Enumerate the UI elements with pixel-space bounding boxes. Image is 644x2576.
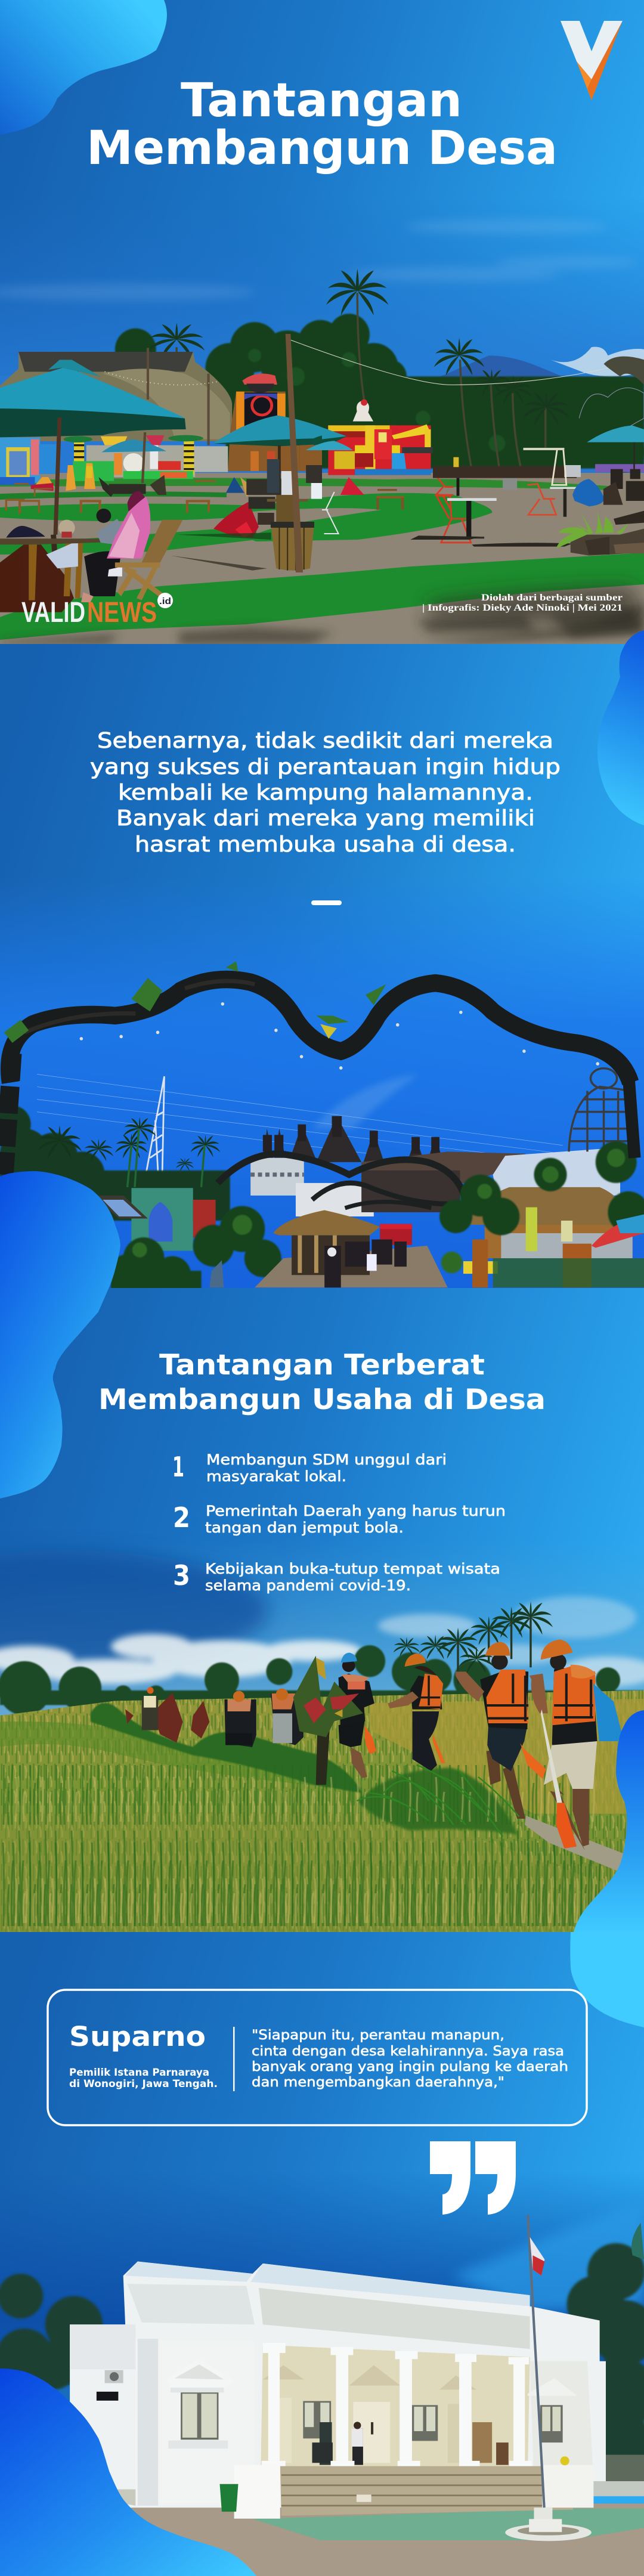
photo: rice field [0, 1596, 644, 1968]
list item 3: selama pandemi covid-19. [205, 1577, 411, 1594]
crowd [324, 1240, 407, 1287]
people on porch [320, 2422, 332, 2465]
wooden chair [115, 520, 183, 600]
speaker role: di Wonogiri, Jawa Tengah. [69, 2078, 218, 2089]
list item 3 [173, 1559, 500, 1594]
steps [280, 2466, 573, 2516]
building body [70, 2262, 606, 2507]
tower [146, 1076, 165, 1175]
people and seating [5, 459, 322, 538]
quote text: cinta dengan desa kelahirannya. Saya rasa [252, 2044, 564, 2059]
icon: closing quotation mark [430, 2141, 516, 2215]
grass ridge [91, 1703, 361, 1793]
logo: ValidNews wordmark: VALID [21, 597, 85, 628]
credit line: Diolah dari berbagai sumber [481, 593, 623, 603]
logo: ValidNews wordmark: NEWS [87, 597, 157, 628]
plant and rock [556, 509, 644, 556]
large arch [4, 961, 634, 1175]
windows [181, 2392, 563, 2442]
person 1 [530, 1639, 622, 1850]
quote text: dan mengembangkan daerahnya," [252, 2075, 504, 2090]
vertical divider [233, 2027, 235, 2091]
quote box [48, 1990, 587, 2125]
person 5 and 6 far [224, 1689, 304, 1747]
photo: arch and village [0, 961, 644, 1294]
chairs and tables [436, 477, 556, 543]
logo: ValidNews wordmark [21, 593, 173, 628]
intro text: yang sukses di perantauan ingin hidup [90, 755, 561, 779]
quote text: "Siapapun itu, perantau manapun, [252, 2027, 504, 2043]
big umbrella [0, 360, 186, 552]
panel: hero title and park photo [0, 0, 644, 644]
right umbrella [587, 425, 644, 442]
person 3 [388, 1654, 445, 1771]
green bin [220, 2484, 239, 2512]
intro text: kembali ke kampung halamannya. [118, 781, 533, 805]
title: Membangun Desa [86, 122, 558, 175]
tent and thatched roof [493, 1147, 620, 1196]
quote text: banyak orang yang ingin pulang ke daerah [252, 2059, 568, 2075]
blob: left side middle [0, 1171, 120, 1498]
table and family [0, 491, 150, 612]
blob: bottom left [0, 2368, 256, 2576]
bouncy castle [328, 400, 433, 475]
green wall [131, 1188, 193, 1251]
rice field [0, 1690, 644, 1968]
robot inflatable [228, 373, 322, 471]
list item 2: 2 [173, 1501, 190, 1534]
photo: park scene [0, 269, 644, 644]
blob: right side lower [570, 1710, 644, 2027]
intro text: Banyak dari mereka yang memiliki [116, 806, 535, 831]
panel: challenges list and rice field photo [0, 1288, 644, 1968]
foreground grass texture [0, 1765, 596, 1932]
small croton plants [125, 1692, 209, 1743]
panel: intro text and arch photo [0, 644, 644, 1294]
blob: right side upper [597, 630, 644, 825]
trees left [0, 1106, 230, 1221]
list item 3: 3 [173, 1559, 190, 1592]
inflatables [0, 435, 228, 485]
title [86, 74, 558, 175]
concrete path [525, 1816, 626, 1874]
panel: quote and palace photo [0, 1932, 644, 2576]
intro text [90, 729, 561, 857]
list item 2: Pemerintah Daerah yang harus turun [206, 1503, 506, 1519]
person 4 [339, 1653, 376, 1778]
blue beanbag [572, 479, 605, 506]
columns [262, 2343, 532, 2467]
logo: ValidNews wordmark: .id [159, 596, 171, 606]
blob: top right of quote panel overlay [570, 1932, 644, 2027]
grass clump [357, 1765, 519, 1837]
intro text: Sebenarnya, tidak sedikit dari mereka [97, 729, 553, 753]
croton plant [293, 1656, 363, 1785]
mid umbrella [213, 416, 322, 443]
divider dash [311, 900, 342, 905]
speaker role [69, 2067, 218, 2089]
icon: V logo [561, 21, 623, 100]
pole and barrel [271, 334, 314, 572]
list item 1: Membangun SDM unggul dari [206, 1451, 447, 1468]
lower tables row and distant seating [433, 466, 577, 478]
building [250, 1116, 526, 1216]
speaker role: Pemilik Istana Parnaraya [69, 2067, 209, 2078]
small umbrellas right [314, 434, 346, 445]
heading: challenges [98, 1349, 546, 1416]
inner arches [218, 1154, 464, 1196]
quote text [252, 2027, 568, 2090]
road and thatch hut [255, 1246, 448, 1287]
lawns [0, 478, 644, 640]
trees [0, 2243, 644, 2471]
title: Tantangan [181, 74, 462, 128]
intro text: hasrat membuka usaha di desa. [135, 832, 516, 857]
list item 3: Kebijakan buka-tutup tempat wisata [205, 1561, 500, 1577]
signs and fences [463, 1261, 498, 1274]
blob: top left corner [0, 0, 167, 135]
vegetation [111, 1141, 644, 1294]
list item 1: masyarakat lokal. [206, 1468, 346, 1485]
list item 1: 1 [172, 1451, 184, 1483]
credit line [422, 593, 623, 613]
list item 2 [173, 1501, 506, 1536]
person 2 [456, 1642, 546, 1819]
ground [123, 2504, 644, 2576]
heading: challenges: Tantangan Terberat [159, 1349, 485, 1382]
list item 1 [172, 1451, 447, 1485]
heading: challenges: Membangun Usaha di Desa [98, 1383, 546, 1416]
speaker name: Suparno [69, 2021, 206, 2052]
ground shadows [0, 608, 644, 644]
flag and pole [505, 2215, 592, 2541]
tree line [0, 1645, 644, 1716]
small umbrellas [101, 439, 166, 452]
list item 2: tangan dan jemput bola. [205, 1519, 404, 1536]
photo: palace [0, 2199, 644, 2576]
credit line: | Infografis: Dieky Ade Ninoki | Mei 2021 [422, 603, 623, 613]
